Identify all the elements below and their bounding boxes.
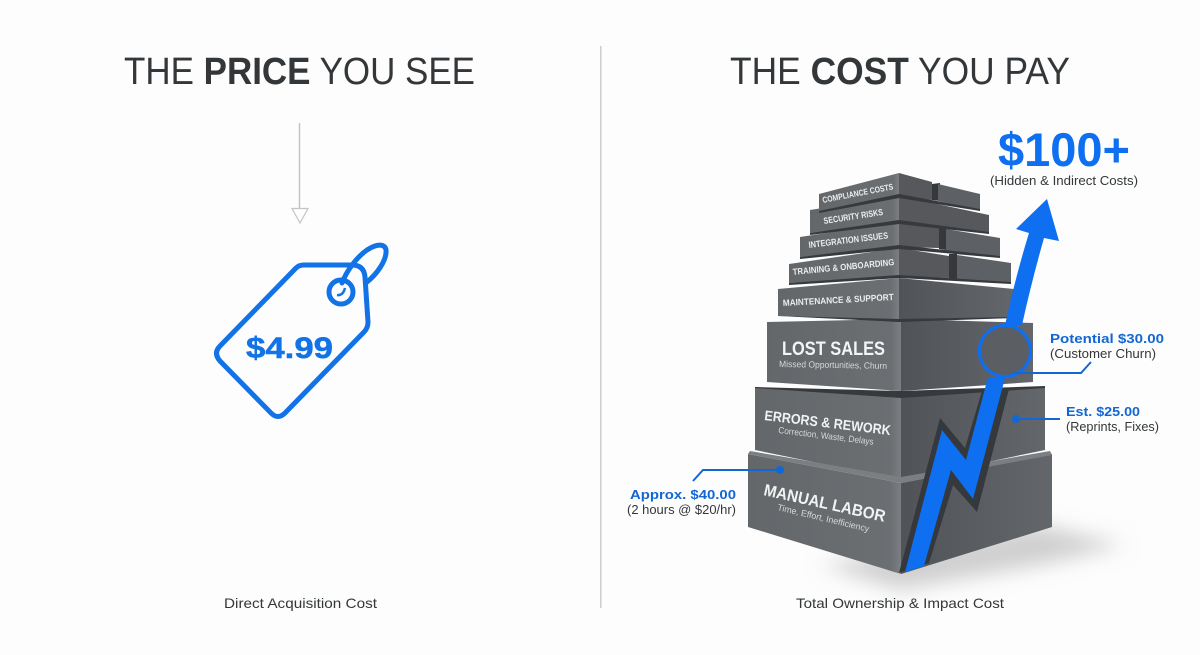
block: security risks: SECURITY RISKS: [823, 207, 884, 226]
callout: est 25: (Reprints, Fixes): [1066, 420, 1159, 434]
callout: approx 40: [627, 466, 784, 517]
arrow: down to price tag: [292, 123, 308, 223]
arrow: rising cost: [899, 199, 1059, 573]
block: manual labor: Time, Effort, Inefficiency: [777, 502, 871, 534]
total cost: $100+: [998, 123, 1130, 176]
block: training and onboarding: [789, 248, 1011, 285]
block: errors and rework: ERRORS & REWORK: [764, 407, 892, 438]
caption: direct acquisition cost: Direct Acquisition Cost: [224, 595, 377, 611]
caption: total ownership and impact cost: Total Ownership & Impact Cost: [796, 595, 1004, 611]
callout circle: [980, 326, 1030, 376]
block stack: [748, 173, 1052, 574]
heading: the cost you pay: THE COST YOU PAY: [730, 51, 1070, 93]
callout: approx 40: (2 hours @ $20/hr): [627, 503, 736, 517]
block: compliance costs: [819, 173, 980, 213]
block: security risks: [810, 196, 989, 235]
block stack shadow: [820, 525, 1125, 590]
block: maintenance and support: [778, 278, 1014, 322]
callout: potential 30: [1013, 331, 1164, 373]
block: integration issues: INTEGRATION ISSUES: [808, 230, 889, 250]
callout: est 25: [1012, 404, 1159, 434]
block: manual labor: MANUAL LABOR: [762, 481, 887, 526]
block: integration issues: [800, 222, 1000, 259]
block: errors and rework: [755, 386, 1045, 480]
divider: [600, 46, 602, 608]
callout: approx 40: Approx. $40.00: [630, 487, 736, 502]
block: errors and rework: Correction, Waste, Delays: [778, 425, 875, 447]
block: lost sales: LOST SALES: [782, 339, 885, 360]
callout: est 25: Est. $25.00: [1066, 404, 1140, 419]
block: manual labor: [748, 451, 1052, 574]
price value: $4.99: [246, 332, 333, 365]
block: compliance costs: COMPLIANCE COSTS: [821, 181, 894, 205]
heading: the price you see: THE PRICE YOU SEE: [124, 51, 475, 93]
total cost note: (Hidden & Indirect Costs): [990, 174, 1138, 188]
callout: potential 30: Potential $30.00: [1050, 331, 1164, 346]
icon: price tag: [216, 245, 386, 416]
block: lost sales: [767, 319, 1033, 391]
callout: potential 30: (Customer Churn): [1050, 347, 1156, 361]
block: lost sales: Missed Opportunities, Churn: [779, 359, 887, 371]
block: training and onboarding: TRAINING & ONBOARDING: [792, 257, 895, 277]
block: maintenance and support: MAINTENANCE & SUPPORT: [783, 292, 894, 308]
